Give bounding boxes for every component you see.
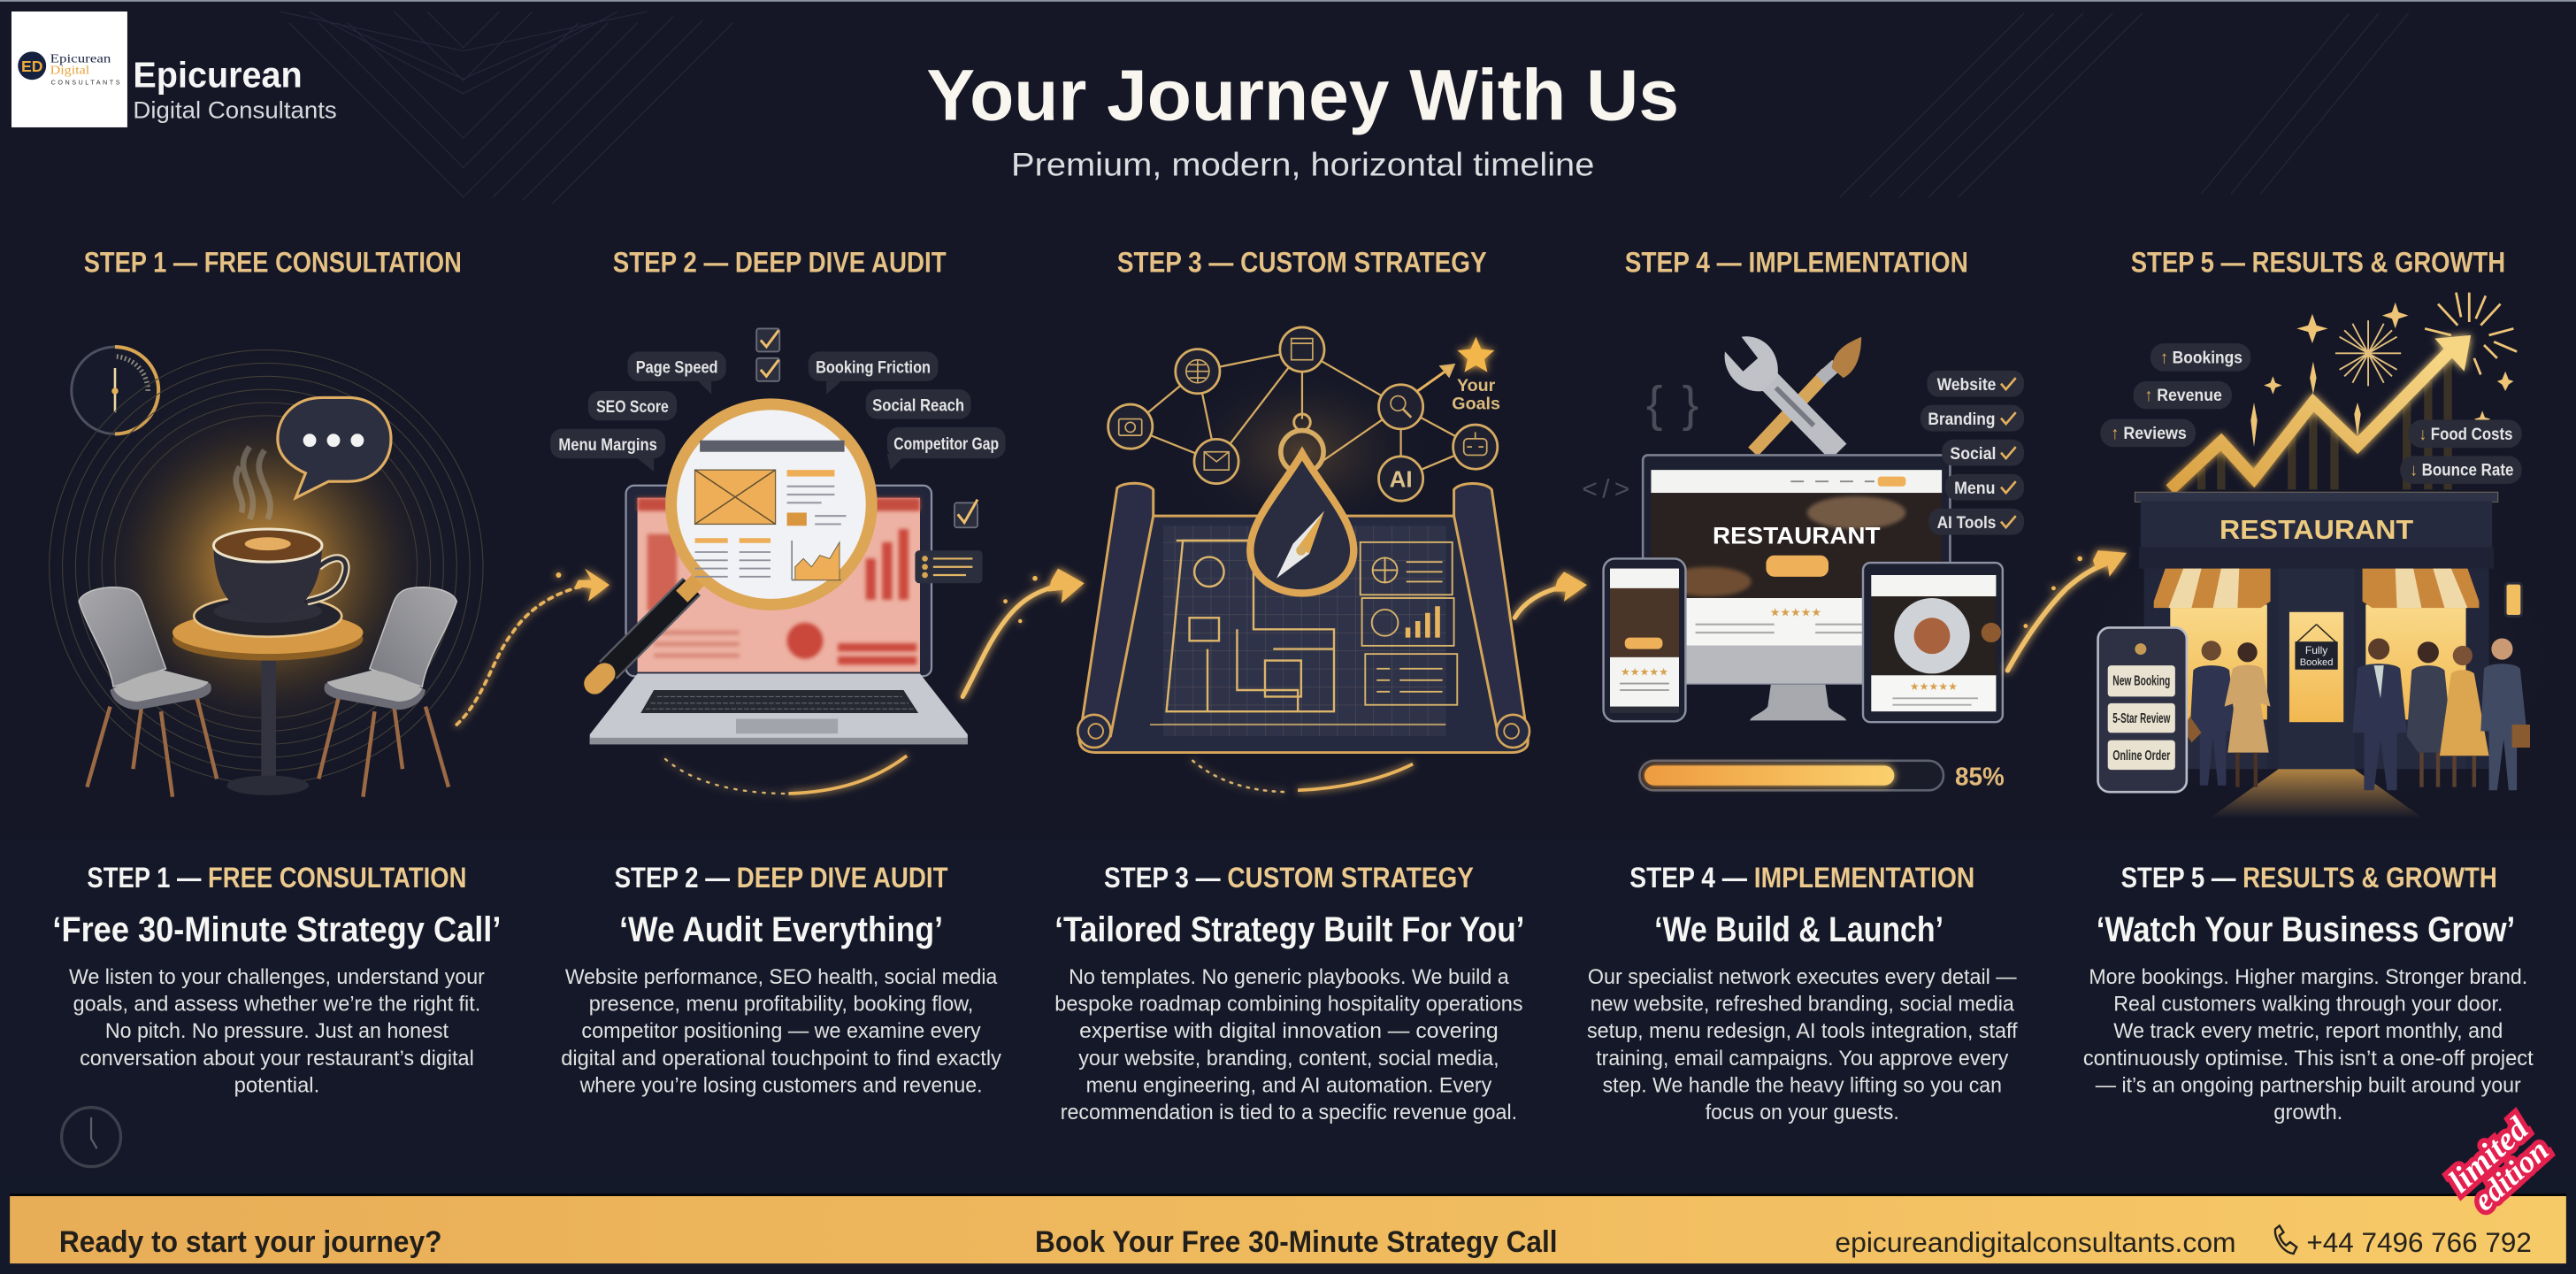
person 6: [2480, 639, 2530, 790]
text block: step 3: your website, branding, content, social media,: [1078, 1047, 1499, 1071]
audit metric pills: Social Reach: [872, 395, 964, 415]
logo: CONSULTANTS: [51, 79, 120, 87]
text block: step 1: conversation about your restaurant’s digital: [80, 1047, 474, 1071]
ground light: [2210, 769, 2423, 818]
text block: step 5: ‘Watch Your Business Grow’: [2097, 909, 2515, 949]
coffee cup: [194, 529, 346, 637]
text block: step 3: menu engineering, and AI automation. Every: [1086, 1073, 1491, 1097]
step headings row: STEP 4 — IMPLEMENTATION: [1625, 246, 1968, 278]
text block: step 5: — it’s an ongoing partnership built around your: [2096, 1073, 2521, 1097]
text block: step 4: focus on your guests.: [1706, 1101, 1899, 1124]
text block: step 1: We listen to your challenges, understand your: [69, 965, 485, 989]
brand name: [133, 54, 337, 124]
illustration: step 2 audit: [550, 328, 1006, 794]
arrow: step 4 to step 5: [2007, 550, 2127, 671]
code symbols: [1582, 376, 1698, 504]
checklist pills: AI Tools: [1937, 513, 1996, 533]
phone with notifications: New Booking: [2112, 673, 2170, 688]
sign: fully booked: Booked: [2300, 657, 2333, 668]
text block: step 3: No templates. No generic playbooks. We build a: [1069, 965, 1509, 989]
text block: step 2: Website performance, SEO health, social media: [565, 965, 998, 989]
arrow: step 3 to step 4: [1514, 572, 1587, 618]
illustration: step 5 results and growth: [2070, 293, 2563, 818]
metric pills: ↓ Bounce Rate: [2410, 461, 2513, 480]
brand name: Epicurean: [133, 54, 303, 95]
restaurant shopfront: RESTAURANT: [2220, 515, 2413, 545]
text block: step 5: Real customers walking through your door.: [2113, 993, 2503, 1017]
text block: step 4: [1587, 862, 2018, 1124]
dotted path: [665, 756, 907, 794]
icon: star with goals: Your: [1457, 376, 1496, 395]
limited edition sticker: limited: [2442, 1110, 2536, 1200]
step headings row: STEP 1 — FREE CONSULTATION: [84, 246, 462, 278]
icon: wrench: [1725, 336, 1838, 452]
concentric glow: [36, 337, 496, 797]
step headings row: STEP 5 — RESULTS & GROWTH: [2131, 246, 2505, 278]
icon: wall lamp: [2505, 583, 2522, 616]
icon: star with goals: [1452, 337, 1500, 413]
text block: step 5: More bookings. Higher margins. Stronger brand.: [2089, 965, 2527, 989]
blueprint scroll: [1077, 483, 1530, 753]
phone number: +44 7496 766 792: [2306, 1226, 2532, 1258]
tablet mockup: ★★★★★: [1910, 680, 1958, 693]
text block: step 3: bespoke roadmap combining hospitality operations: [1054, 993, 1523, 1017]
growth chart arrow: [2170, 335, 2471, 489]
icon: paintbrush: [1753, 337, 1861, 452]
cta prompt: Ready to start your journey?: [59, 1225, 442, 1259]
text block: step 4: setup, menu redesign, AI tools integration, staff: [1587, 1019, 2018, 1043]
audit metric pills: Booking Friction: [816, 358, 931, 378]
text block: step 2: ‘We Audit Everything’: [619, 909, 943, 949]
text block: step 5: We track every metric, report monthly, and: [2113, 1019, 2503, 1043]
text block: step 2: presence, menu profitability, booking flow,: [589, 993, 973, 1017]
monitor: [1643, 455, 1950, 720]
text block: step 2: STEP 2 — DEEP DIVE AUDIT: [615, 862, 948, 894]
text block: step 3: [1054, 862, 1524, 1124]
floor plan: [1150, 541, 1445, 725]
audit metric pills: Menu Margins: [558, 435, 657, 455]
call to action bar: [10, 1193, 2566, 1263]
dotted path: [1192, 761, 1413, 792]
progress bar: 85%: [1955, 764, 2005, 792]
text block: step 1: potential.: [234, 1073, 319, 1097]
person 3: [2352, 639, 2407, 790]
step headings row: STEP 3 — CUSTOM STRATEGY: [1117, 246, 1487, 278]
brand name: Digital Consultants: [133, 96, 337, 124]
text block: step 2: competitor positioning — we examine every: [581, 1019, 981, 1043]
audit metric pills: Competitor Gap: [893, 434, 999, 454]
blueprint side panels: [1361, 542, 1457, 705]
checklist pills: Website: [1937, 375, 1996, 395]
sign: fully booked: [2295, 625, 2338, 670]
laptop: [590, 486, 968, 744]
step headings row: STEP 2 — DEEP DIVE AUDIT: [613, 246, 947, 278]
phone with notifications: [2098, 627, 2187, 792]
person 2: [2225, 642, 2271, 787]
limited edition sticker: [2442, 1110, 2556, 1221]
code symbols: </>: [1582, 475, 1629, 504]
audit metric pills: [550, 351, 1006, 472]
audit metric pills: Page Speed: [636, 358, 718, 378]
checklist pills: Branding: [1928, 410, 1995, 429]
network nodes: [1108, 327, 1498, 501]
customers group: [2183, 639, 2530, 790]
person 4: [2407, 641, 2451, 787]
text block: step 2: where you’re losing customers and revenue.: [579, 1073, 983, 1097]
text block: step 2: digital and operational touchpoint to find exactly: [561, 1047, 1001, 1071]
awnings: [2154, 569, 2479, 608]
logo: [12, 12, 127, 127]
compass: [1250, 414, 1353, 593]
text block: step 1: ‘Free 30-Minute Strategy Call’: [52, 909, 501, 949]
text block: step 5: growth.: [2273, 1101, 2342, 1124]
logo: Epicurean: [50, 52, 111, 65]
text block: step 4: training, email campaigns. You approve every: [1596, 1047, 2008, 1071]
text block: step 4: Our specialist network executes every detail —: [1588, 965, 2017, 989]
sign: fully booked: Fully: [2305, 644, 2327, 656]
tablet mockup: [1863, 563, 2003, 722]
monitor: RESTAURANT: [1713, 522, 1881, 549]
checklist pills: [1920, 371, 2024, 535]
title: Your Journey With Us: [926, 56, 1679, 136]
magnifying glass: [594, 404, 871, 684]
person 5: [2440, 646, 2489, 787]
metric pills: ↑ Revenue: [2145, 386, 2222, 405]
icon: checkboxes: [756, 328, 978, 527]
metric pills: ↑ Bookings: [2160, 348, 2242, 367]
phone with notifications: Online Order: [2112, 748, 2170, 764]
text block: step 2: [561, 862, 1001, 1097]
network nodes: AI: [1390, 466, 1413, 493]
step headings row: [84, 246, 2505, 278]
text block: step 3: expertise with digital innovation — covering: [1079, 1019, 1499, 1043]
text block: step 5: [2083, 862, 2534, 1124]
table: [172, 611, 363, 795]
text block: step 3: ‘Tailored Strategy Built For You’: [1054, 909, 1524, 949]
sparkles: [2250, 303, 2513, 447]
logo: ED: [21, 58, 42, 75]
metric pills: [2100, 343, 2522, 484]
icon: star with goals: Goals: [1452, 394, 1500, 413]
monitor: ★★★★★: [1770, 605, 1821, 618]
text block: step 1: goals, and assess whether we’re the right fit.: [73, 993, 480, 1017]
text block: step 5: STEP 5 — RESULTS & GROWTH: [2121, 862, 2497, 894]
checklist pills: Social: [1950, 444, 1996, 464]
small data card: [915, 550, 983, 583]
logo: Digital: [50, 64, 89, 77]
steam: [236, 447, 271, 519]
text block: step 4: ‘We Build & Launch’: [1654, 909, 1944, 949]
restaurant shopfront: [2135, 492, 2522, 769]
person 1: [2183, 641, 2236, 786]
text block: step 4: STEP 4 — IMPLEMENTATION: [1629, 862, 1974, 894]
arrow: step 1 to step 2: [456, 569, 610, 725]
icon: phone: [2275, 1225, 2296, 1254]
arrow: step 2 to step 3: [962, 569, 1085, 696]
text block: step 3: recommendation is tied to a specific revenue goal.: [1061, 1101, 1517, 1124]
metric pills: ↑ Reviews: [2111, 424, 2187, 443]
phone mockup: [1604, 558, 1685, 721]
text block: step 1: [52, 862, 501, 1097]
left chair: [79, 587, 217, 797]
text block: step 4: step. We handle the heavy lifting so you can: [1603, 1073, 2002, 1097]
website: epicureandigitalconsultants.com: [1835, 1226, 2236, 1258]
subtitle: Premium, modern, horizontal timeline: [1011, 146, 1594, 183]
text block: step 1: STEP 1 — FREE CONSULTATION: [87, 862, 466, 894]
audit metric pills: SEO Score: [596, 397, 669, 417]
progress bar: [1639, 761, 2005, 792]
phone mockup: ★★★★★: [1621, 665, 1668, 678]
right chair: [318, 587, 456, 797]
text block: step 1: No pitch. No pressure. Just an honest: [105, 1019, 448, 1043]
phone with notifications: 5-Star Review: [2112, 711, 2170, 726]
illustration: step 4 implementation: [1582, 336, 2024, 792]
icon: speech bubble: [278, 397, 391, 498]
text block: step 3: STEP 3 — CUSTOM STRATEGY: [1104, 862, 1474, 894]
fireworks: [2335, 293, 2517, 386]
text block: step 5: continuously optimise. This isn’t a one-off project: [2083, 1047, 2534, 1071]
code symbols: { }: [1646, 376, 1698, 431]
illustration: step 3 strategy blueprint: [1077, 327, 1530, 792]
checklist pills: Menu: [1954, 479, 1995, 498]
cta main: Book Your Free 30-Minute Strategy Call: [1035, 1225, 1558, 1259]
illustration: step 1 coffee consultation: [36, 337, 496, 797]
text block: step 4: new website, refreshed branding, social media: [1591, 993, 2015, 1017]
metric pills: ↓ Food Costs: [2419, 425, 2513, 444]
icon: timer clock: [72, 347, 158, 434]
limited edition sticker: edition: [2466, 1132, 2556, 1217]
icon: faint clock: [62, 1108, 120, 1167]
